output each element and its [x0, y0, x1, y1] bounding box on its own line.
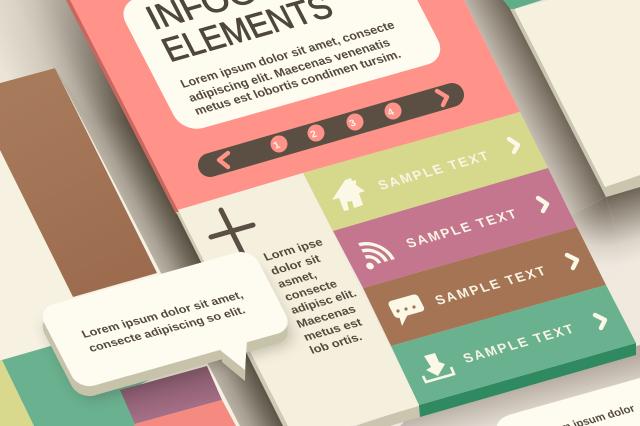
- page 2: [308, 124, 324, 142]
- bubble side: [37, 258, 293, 400]
- label: SAMPLE TEXT: [403, 206, 520, 251]
- card face: [514, 0, 640, 187]
- pagination bar: [210, 91, 452, 167]
- cream bottom edge: [340, 405, 420, 426]
- green bottom edge: [419, 343, 636, 417]
- right arrow: [437, 91, 447, 105]
- page 4: 4: [386, 107, 396, 118]
- body text: adipiscing elit. Maecenas venenatis: [186, 36, 393, 105]
- green strip: [503, 0, 542, 10]
- bubble text: [80, 290, 248, 355]
- cream side edge: [176, 212, 290, 426]
- brown bar: [0, 68, 157, 297]
- column text: adipisc elit.: [289, 288, 359, 317]
- band: download: [391, 285, 636, 405]
- icon: house: [332, 178, 365, 211]
- column text: metus est: [302, 317, 364, 344]
- icon: rss: [355, 238, 395, 270]
- shadow right of main panel: [400, 0, 640, 426]
- column text: [262, 237, 364, 357]
- chevron: [509, 139, 518, 152]
- label: SAMPLE TEXT: [432, 263, 549, 308]
- red band: [134, 400, 236, 426]
- band: home: [303, 112, 548, 231]
- band: chat: [363, 227, 606, 346]
- left arrow: [219, 153, 228, 167]
- label: SAMPLE TEXT: [460, 321, 577, 366]
- column text: Maecenas: [295, 304, 358, 331]
- panel: left background card: [0, 68, 240, 426]
- card side: [510, 9, 640, 197]
- body text: Lorem ipsum dolor sit amet, consecte: [178, 18, 397, 91]
- page 1: 1: [272, 140, 282, 151]
- icon: plus: [211, 210, 253, 256]
- column text: lob ortis.: [308, 332, 364, 357]
- page 2: 2: [309, 129, 319, 140]
- pink header face: [70, 0, 520, 210]
- panel: bottom right card: [497, 378, 640, 426]
- band: rss: [333, 168, 577, 288]
- chevron: [538, 198, 547, 211]
- bubble cast shadow: [41, 261, 297, 403]
- column text: asmet,: [276, 269, 319, 291]
- cream column face: [178, 173, 419, 426]
- lime band: [0, 360, 34, 426]
- white title card: [116, 0, 448, 134]
- label: SAMPLE TEXT: [375, 148, 492, 193]
- bubble text: consecte adipiscing so elit.: [87, 305, 248, 355]
- icon: download: [423, 353, 454, 382]
- body text: [178, 18, 403, 118]
- page 4: [384, 102, 402, 120]
- purple band: [120, 366, 222, 424]
- page 3: 3: [348, 118, 358, 129]
- icon: chat bubble: [387, 294, 426, 326]
- panel: top right card: [503, 0, 640, 197]
- body text: metus est lobortis condimen tursim.: [192, 47, 403, 118]
- bubble face: [37, 248, 293, 390]
- pink side edge: [66, 0, 179, 214]
- chevron: [567, 255, 577, 268]
- chevron: [595, 315, 605, 328]
- page 1: [270, 136, 288, 152]
- column text: Lorm ipse: [262, 237, 325, 264]
- green band: [2, 326, 170, 426]
- shadow left of main panel: [0, 0, 290, 426]
- bubble text: Lorem ipsum dolor sit amet,: [80, 290, 245, 341]
- column text: consecte: [283, 279, 339, 304]
- callout: speech bubble: [37, 248, 297, 403]
- column text: dolor sit: [269, 253, 323, 278]
- page 3: [346, 114, 364, 130]
